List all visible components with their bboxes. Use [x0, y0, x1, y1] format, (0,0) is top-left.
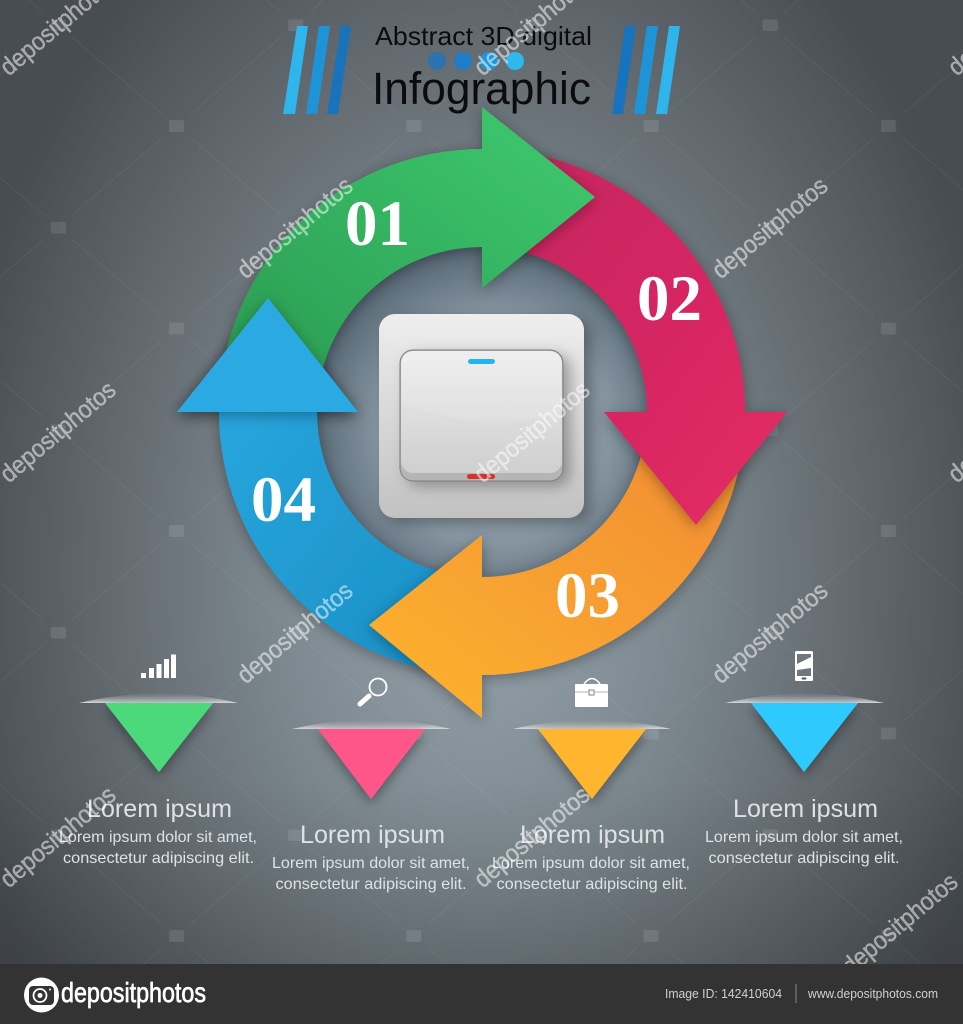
red indicator [467, 474, 495, 479]
footer logo [24, 977, 206, 1012]
item description: Lorem ipsum dolor sit amet, [705, 829, 903, 846]
item description [705, 829, 903, 867]
item description: consectetur adipiscing elit. [708, 850, 900, 867]
amber triangle [538, 729, 646, 799]
heading: abstract 3D digital: Abstract 3D digital [375, 21, 592, 51]
item description: Lorem ipsum dolor sit amet, [59, 829, 257, 846]
icon: left stripes [283, 26, 351, 114]
slit highlight [725, 694, 884, 703]
item 3: amber [492, 678, 690, 893]
item description: consectetur adipiscing elit. [276, 876, 466, 893]
image id: Image ID: 142410604 [665, 987, 782, 1001]
icon: smartphone [795, 651, 813, 681]
footer bar [0, 964, 963, 1024]
decorative dots [428, 52, 524, 70]
slit highlight [79, 694, 238, 703]
pink triangle [318, 729, 425, 799]
item description: consectetur adipiscing elit. [63, 850, 254, 867]
watermarks: depositphotos [469, 376, 595, 488]
item 2: pink [272, 678, 470, 893]
icon: briefcase [575, 678, 608, 707]
slit highlight [513, 720, 671, 729]
rocker face [401, 351, 562, 473]
watermarks: depositphotos [707, 172, 833, 284]
watermarks: depositphotos [469, 781, 595, 893]
number 02: 02 [637, 263, 702, 335]
arrow 01 green [221, 107, 595, 380]
item 1: green [59, 654, 257, 867]
item description: consectetur adipiscing elit. [496, 876, 688, 893]
heading: infographic: Infographic [372, 63, 591, 114]
green triangle [105, 703, 213, 772]
item heading: Lorem ipsum [87, 795, 232, 823]
website url: www.depositphotos.com [807, 987, 938, 1001]
inner circle backdrop [312, 242, 652, 582]
rocker base [400, 350, 563, 481]
light switch illustration [379, 314, 584, 518]
arrow 04 head overlap [177, 298, 358, 412]
icon: right stripes [612, 26, 680, 114]
number 04: 04 [251, 464, 316, 536]
arrow 03 orange [369, 440, 744, 718]
arrow 04 blue [177, 298, 455, 674]
blue indicator [468, 359, 495, 364]
watermarks: depositphotos [232, 577, 358, 689]
watermarks: depositphotos [232, 172, 358, 284]
rocker gloss [402, 351, 561, 422]
item heading: Lorem ipsum [733, 795, 878, 823]
watermarks: depositphotos [707, 577, 833, 689]
item 4: cyan [705, 651, 903, 867]
item description [492, 855, 690, 893]
arrow 02 crimson [510, 150, 787, 525]
number 01: 01 [345, 188, 410, 260]
item heading: Lorem ipsum [520, 821, 665, 849]
icon: magnifier [360, 678, 386, 704]
icon: signal bars [141, 654, 176, 678]
item description [59, 829, 257, 867]
circular arrow diagram [177, 107, 787, 718]
footer logo: depositphotos [61, 977, 206, 1008]
item heading: Lorem ipsum [300, 821, 445, 849]
cyan triangle [751, 703, 858, 772]
switch plate [379, 314, 584, 518]
header: title block [283, 21, 680, 114]
item description: Lorem ipsum dolor sit amet, [492, 855, 690, 872]
number 03: 03 [555, 560, 620, 632]
item description: Lorem ipsum dolor sit amet, [272, 855, 470, 872]
slit highlight [292, 720, 451, 729]
item description [272, 855, 470, 893]
